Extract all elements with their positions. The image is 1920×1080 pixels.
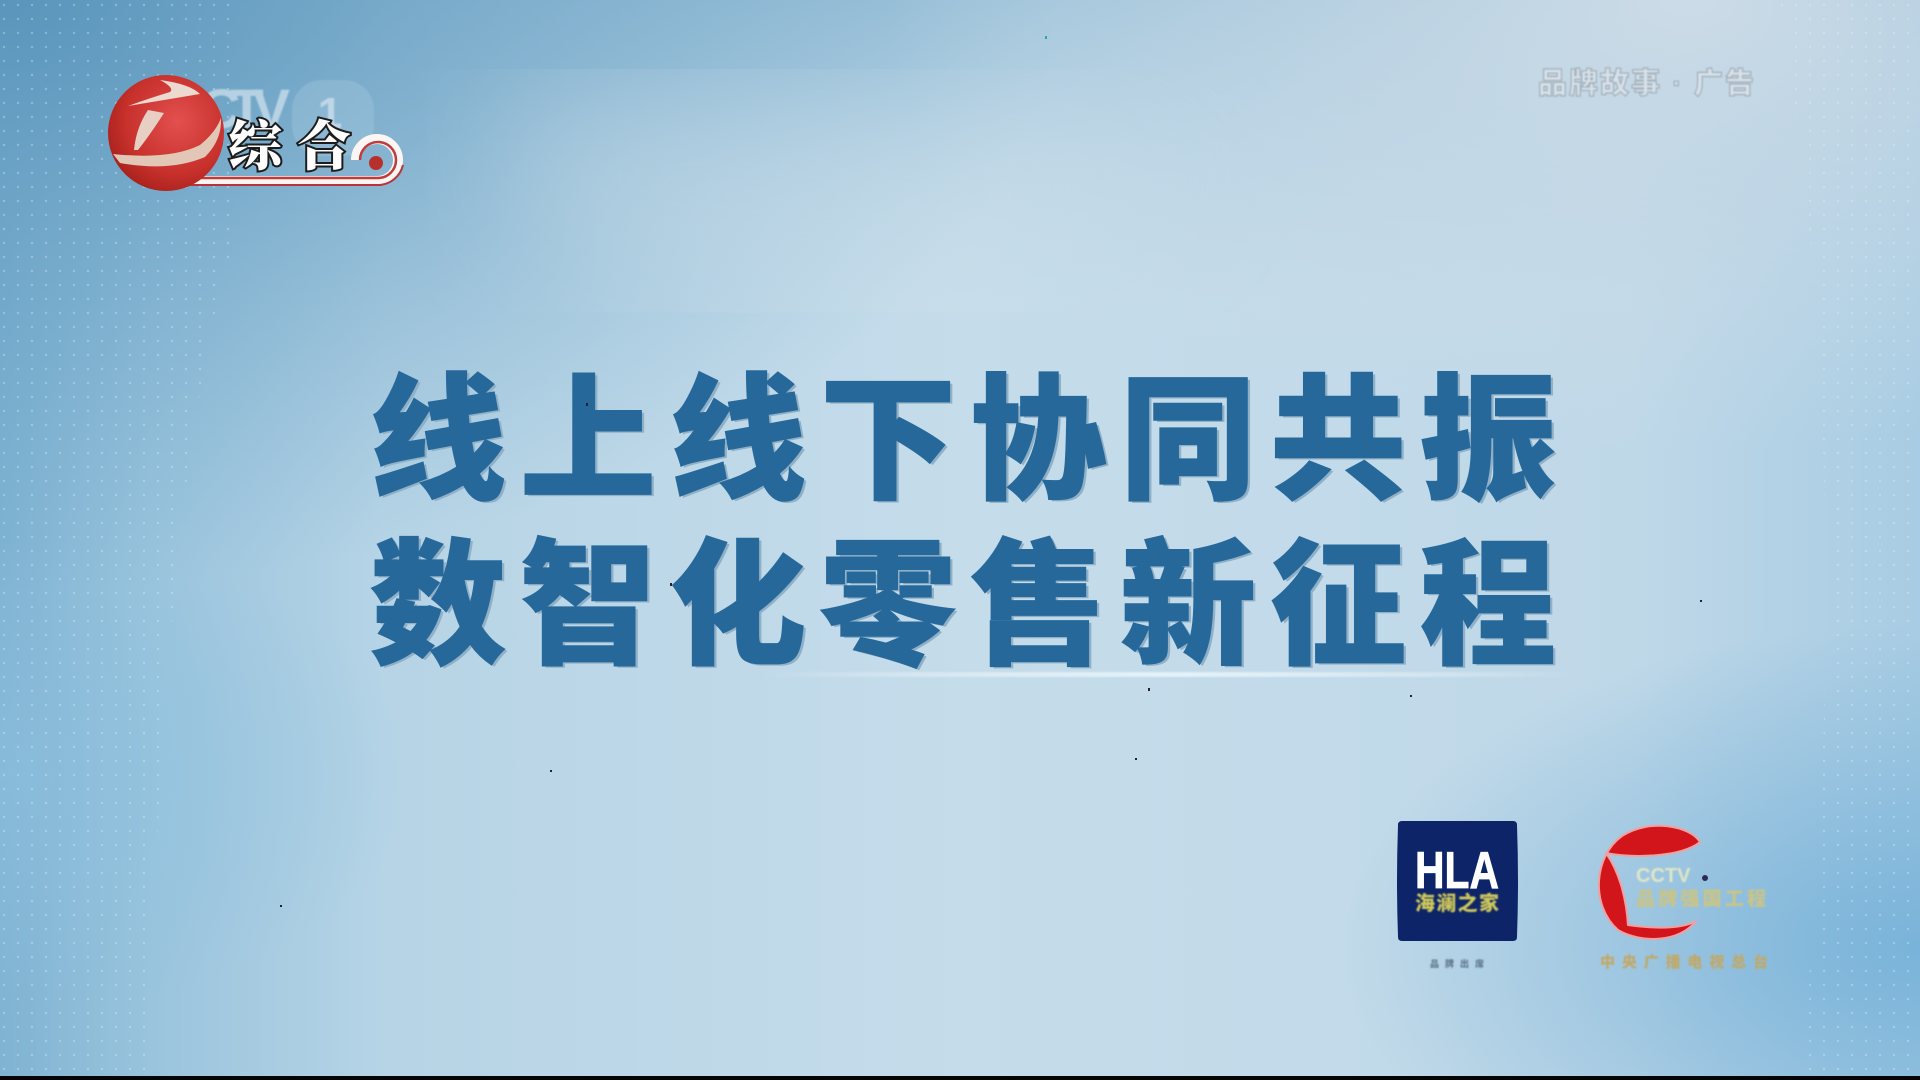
light streak under title xyxy=(760,672,1580,677)
signal specks xyxy=(280,36,1702,907)
title line 1: 振 xyxy=(1420,365,1556,517)
top-right tag: 品牌故事·广告: 品牌故事 · 广告 xyxy=(1538,67,1754,100)
title line 2: 智 xyxy=(523,532,659,684)
title line 2: 化 xyxy=(670,530,806,682)
title line 2 xyxy=(370,530,1559,684)
title line 2: 售 xyxy=(973,532,1109,684)
title line 1: 同 xyxy=(1123,367,1259,519)
title line 2: 程 xyxy=(1420,530,1556,682)
title line 1: 共 xyxy=(1270,365,1406,517)
title line 1 xyxy=(370,365,1559,519)
title line 1: 上 xyxy=(520,365,656,517)
title line 1: 线 xyxy=(373,367,509,519)
title line 2: 零 xyxy=(820,530,956,682)
title line 2: 数 xyxy=(370,530,506,682)
channel logo: 综合 xyxy=(108,75,403,191)
title line 1: 线 xyxy=(673,367,809,519)
channel logo: 综合: 合 xyxy=(297,104,351,181)
CMG caption: 中央广播电视总台 xyxy=(1600,953,1768,971)
title line 2: 新 xyxy=(1120,530,1256,682)
CCTV text: CCTV xyxy=(1636,865,1691,887)
title line 1: 上 xyxy=(523,367,659,519)
title line 2: 征 xyxy=(1273,532,1409,684)
CCTV brand programme logo: 品牌强国工程 xyxy=(1636,888,1766,910)
ghost CCTV-1 watermark: 1 xyxy=(318,89,342,138)
title line 1: 协 xyxy=(970,365,1106,517)
title line 1: 振 xyxy=(1423,367,1559,519)
title line 1: 同 xyxy=(1120,365,1256,517)
title line 1: 下 xyxy=(823,367,959,519)
main title xyxy=(370,365,1559,684)
ghost CCTV-1 watermark xyxy=(200,77,374,156)
CCTV brand programme logo xyxy=(1599,826,1768,971)
HLA logo: 品牌出席 xyxy=(1430,958,1484,969)
title line 2: 零 xyxy=(823,532,959,684)
title line 2: 售 xyxy=(970,530,1106,682)
title line 2: 征 xyxy=(1270,530,1406,682)
ghost CCTV-1 watermark: CTV xyxy=(200,77,290,140)
title line 1: 协 xyxy=(973,367,1109,519)
ribbon swirl xyxy=(190,139,403,185)
title line 1: 下 xyxy=(820,365,956,517)
title line 2: 新 xyxy=(1123,532,1259,684)
HLA logo: 海澜之家 xyxy=(1415,891,1499,915)
title line 1: 线 xyxy=(670,365,806,517)
title line 2: 智 xyxy=(520,530,656,682)
title line 2: 数 xyxy=(373,532,509,684)
HLA logo xyxy=(1397,821,1518,969)
HLA logo: HLA xyxy=(1415,842,1499,900)
label text: 综 xyxy=(228,104,287,181)
title line 2: 程 xyxy=(1423,532,1559,684)
title line 2: 化 xyxy=(673,532,809,684)
title line 1: 共 xyxy=(1273,367,1409,519)
title line 1: 线 xyxy=(370,365,506,517)
red C emblem xyxy=(1599,826,1700,939)
red globe emblem xyxy=(108,75,224,191)
